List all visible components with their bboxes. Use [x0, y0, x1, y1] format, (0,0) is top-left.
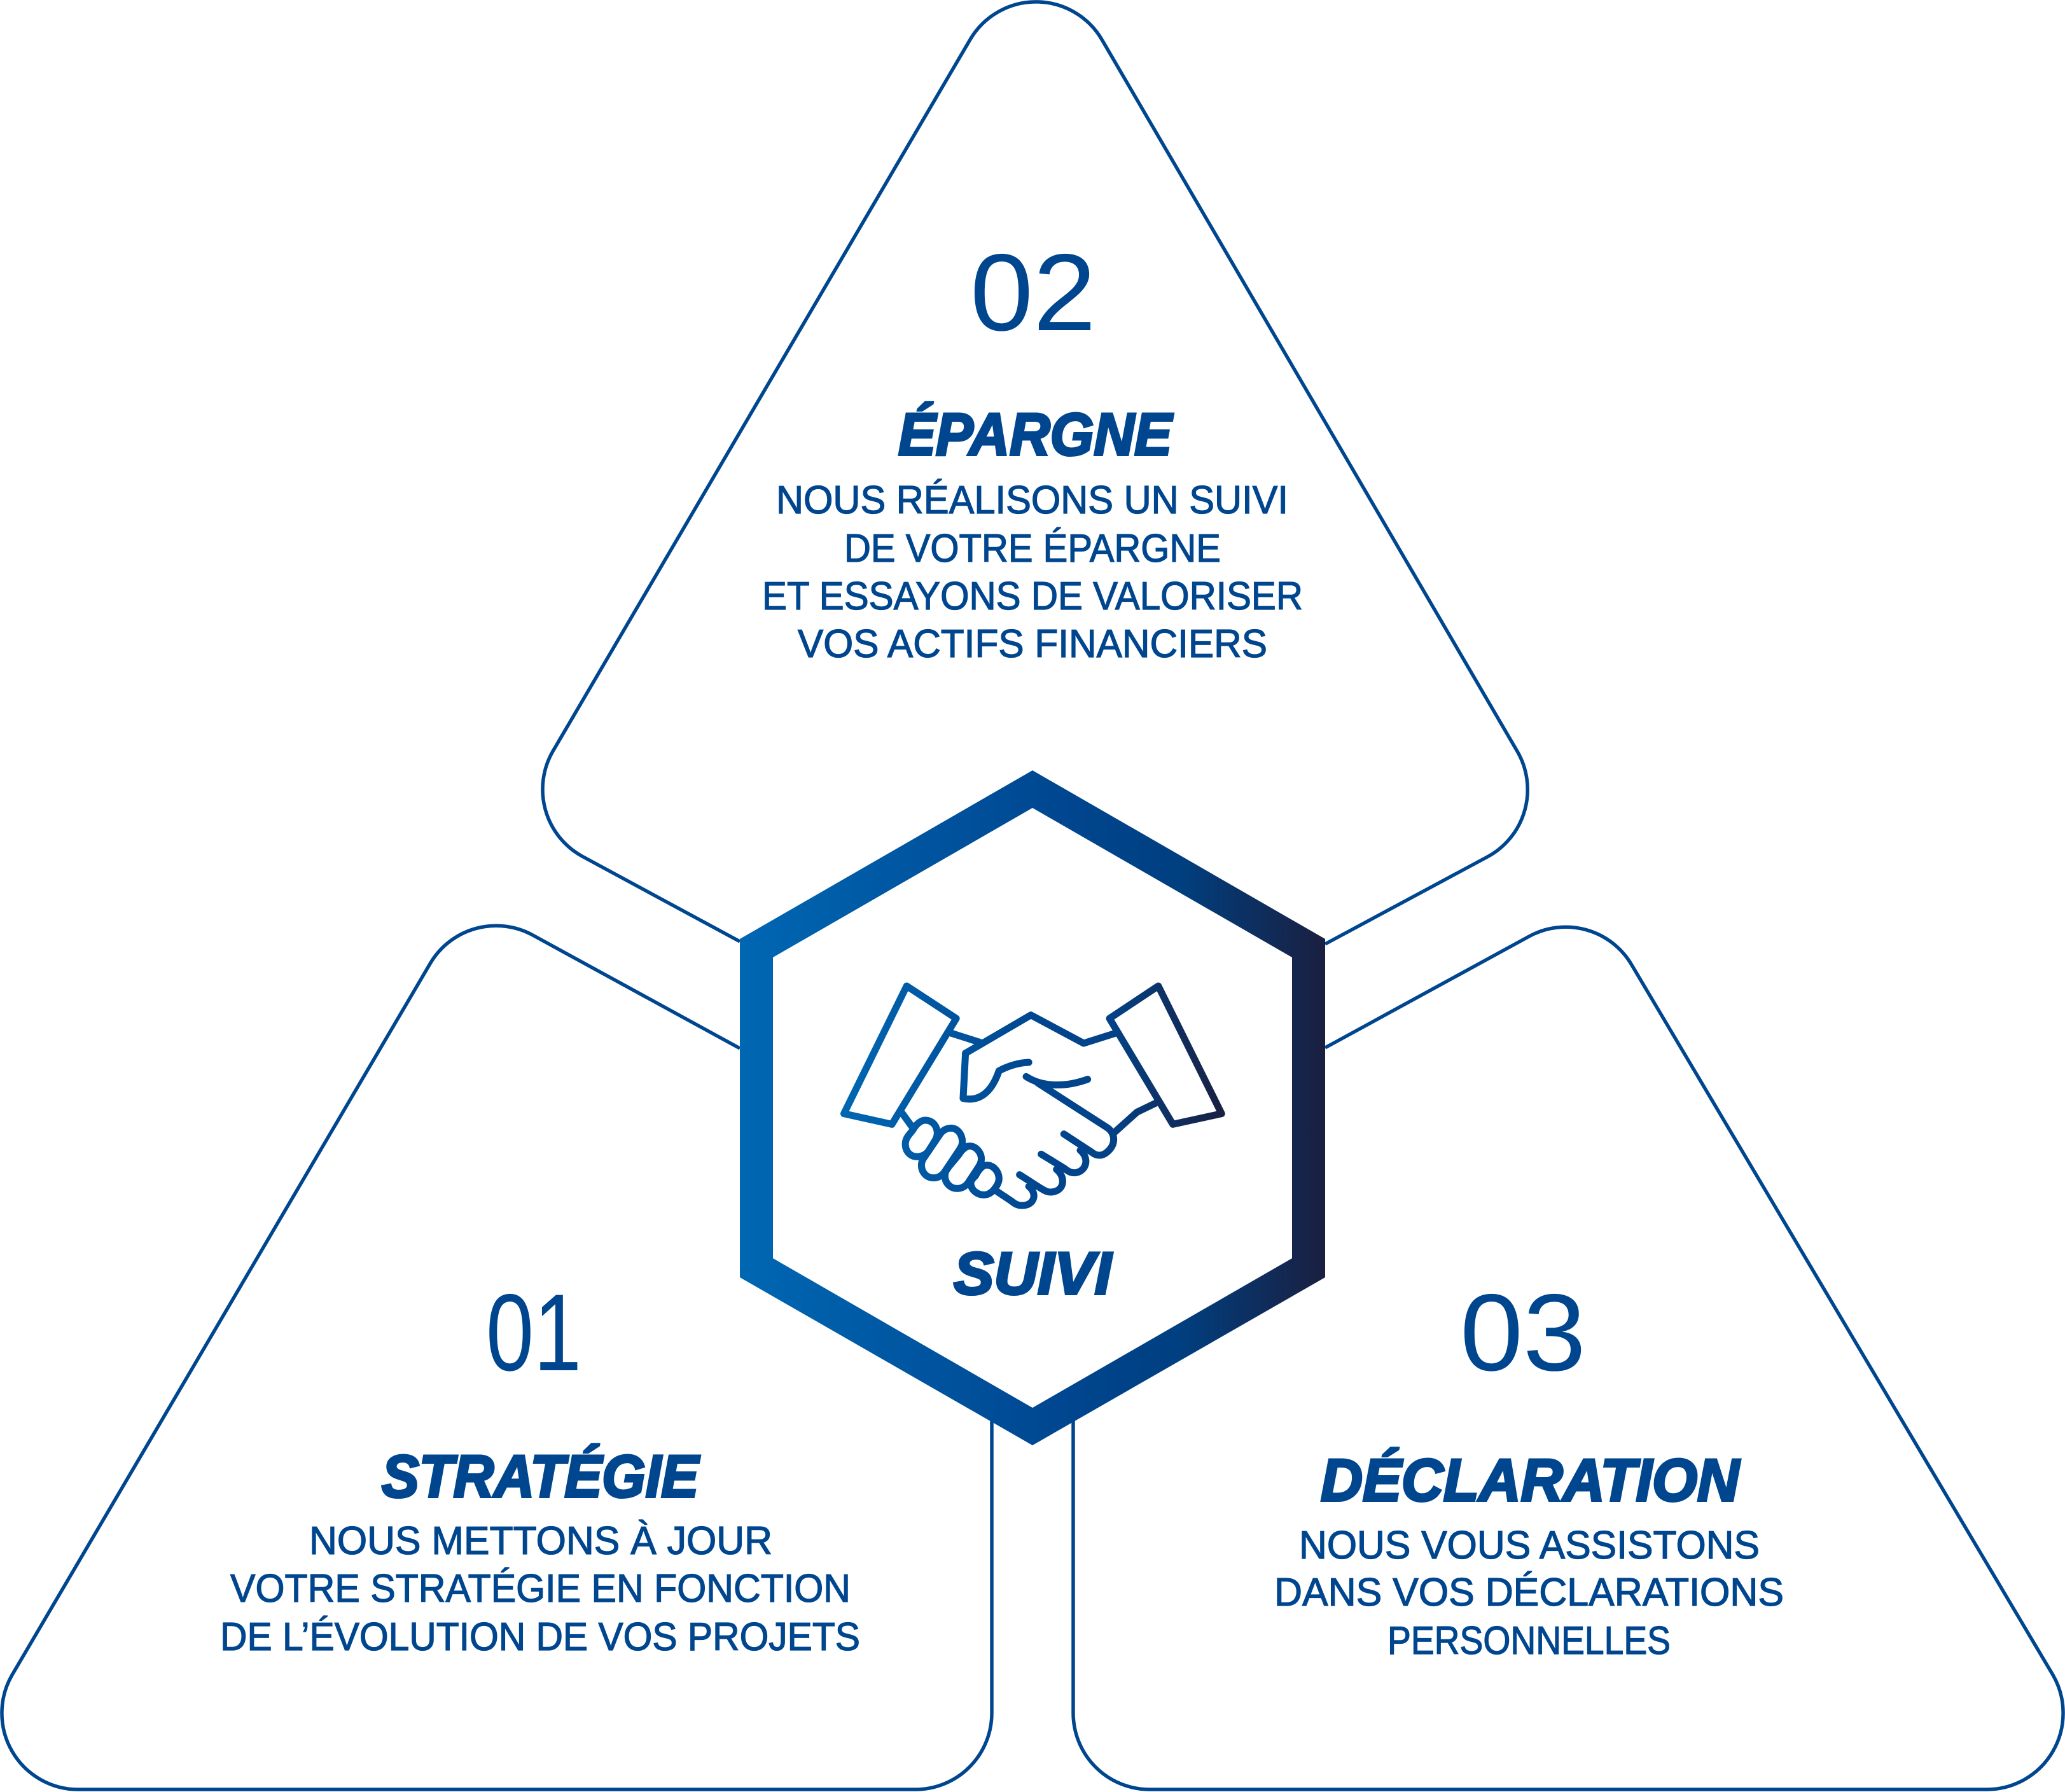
text block: stratégie description: DE L’ÉVOLUTION DE VOS PROJETS: [220, 1615, 860, 1659]
number 02: 02: [970, 232, 1096, 354]
text block: déclaration description: PERSONNELLES: [1387, 1619, 1671, 1663]
panel: 01 stratégie: [2, 926, 992, 1789]
central hexagon: [740, 770, 1325, 1445]
text block: déclaration description: DANS VOS DÉCLARATIONS: [1274, 1571, 1784, 1615]
text block: épargne description: ET ESSAYONS DE VALORISER: [762, 574, 1303, 618]
panel: 02 épargne: [543, 2, 1527, 944]
heading: épargne: ÉPARGNE: [898, 401, 1174, 468]
text block: stratégie description: NOUS METTONS À JOUR: [309, 1519, 772, 1563]
text block: épargne description: VOS ACTIFS FINANCIERS: [798, 622, 1267, 666]
text block: déclaration description: NOUS VOUS ASSISTONS: [1299, 1524, 1760, 1567]
text block: épargne description: NOUS RÉALISONS UN SUIVI: [776, 478, 1288, 522]
number 03: 03: [1460, 1272, 1586, 1394]
heading: stratégie: STRATÉGIE: [382, 1443, 700, 1510]
panel: 03 déclaration: [1073, 927, 2063, 1789]
text block: stratégie description: VOTRE STRATÉGIE EN FONCTION: [230, 1567, 851, 1611]
text block: stratégie description: [220, 1519, 860, 1659]
rounded triangle outline: top: [543, 2, 1527, 944]
text block: épargne description: DE VOTRE ÉPARGNE: [844, 527, 1221, 571]
text block: déclaration description: [1274, 1524, 1784, 1663]
number 01: 01: [486, 1272, 581, 1394]
icon: handshake: [844, 986, 1221, 1205]
heading: déclaration: DÉCLARATION: [1321, 1447, 1741, 1513]
text block: épargne description: [762, 478, 1303, 666]
heading: suivi: SUIVI: [954, 1240, 1113, 1307]
rounded triangle outline: bottom right: [1073, 927, 2063, 1789]
rounded triangle outline: bottom left: [2, 926, 992, 1789]
